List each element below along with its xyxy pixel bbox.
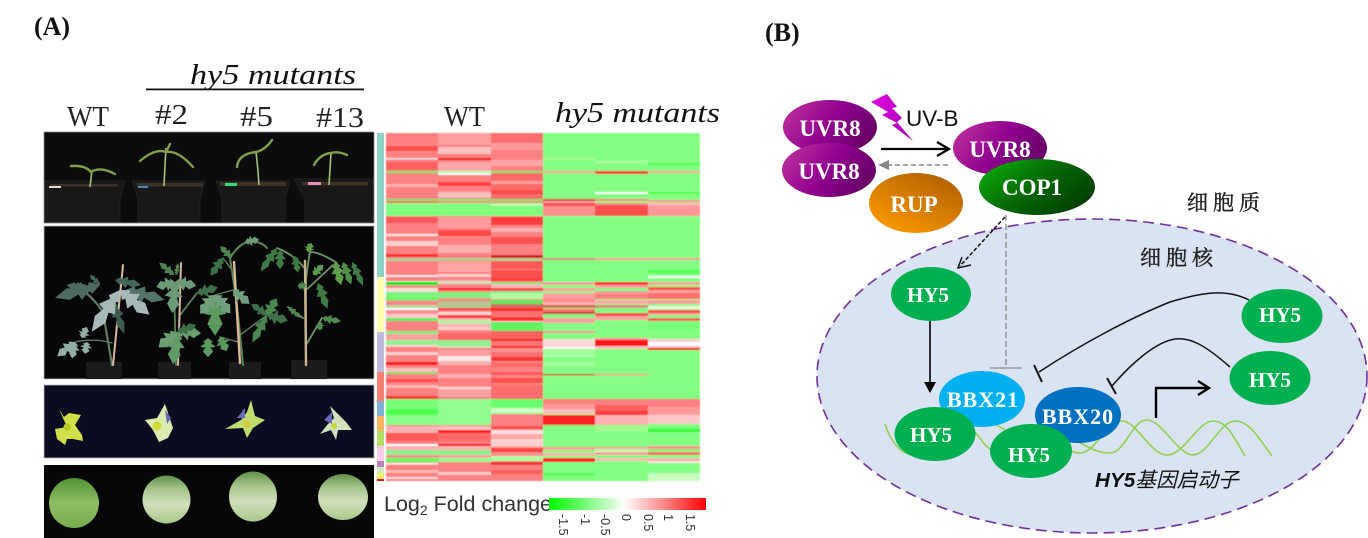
- seedlings: [90, 148, 331, 187]
- flower 2: [145, 404, 173, 442]
- nucleus: [817, 219, 1367, 533]
- BBX20: [1035, 387, 1121, 443]
- pots: [86, 360, 327, 379]
- HY5 right: HY5: [1249, 368, 1291, 392]
- arrow: UVR8 monomerisation: [881, 142, 949, 156]
- colour scale legend: -1: [578, 514, 592, 525]
- legend title: Log: [384, 492, 420, 516]
- panel label B: (B): [765, 18, 800, 47]
- DNA promoter strands: [885, 420, 1272, 456]
- colour scale legend: 0: [619, 514, 633, 521]
- photo panel: grown plants: [44, 226, 374, 379]
- column 6 stripes: [648, 163, 700, 481]
- HY5 on promoter middle: [990, 424, 1072, 478]
- arrow: HY5 to promoter: [924, 321, 936, 393]
- BBX20: BBX20: [1042, 404, 1114, 429]
- heading: hy5 mutants over photos: hy5 mutants: [190, 60, 356, 91]
- flower 3: [225, 400, 265, 438]
- HY5 upper right: [1242, 289, 1322, 343]
- label: HY5 gene promoter: HY5基因启动子: [1095, 469, 1240, 492]
- colour scale legend: -1.5: [556, 514, 570, 536]
- HY5 cytoplasm-side: [891, 267, 971, 321]
- label: nucleus: 细胞核: [1140, 246, 1218, 270]
- UV-B label: UV-B: [906, 106, 959, 131]
- column labels for photos: [67, 100, 364, 134]
- COP1: [979, 159, 1095, 215]
- sample cluster colour bar: [377, 133, 384, 481]
- heatmap heading WT: WT: [444, 102, 485, 133]
- colour scale legend: -0.5: [598, 514, 612, 536]
- panel label A: (A): [34, 12, 70, 41]
- photo panel: fruits: [44, 465, 374, 538]
- leaves plant 2: [153, 259, 220, 365]
- label: cytoplasm: 细胞质: [1187, 191, 1265, 215]
- column 5 stripes: [595, 161, 648, 461]
- column labels for photos: WT: [67, 102, 109, 133]
- HY5 on promoter left: [894, 407, 976, 461]
- photo panel: seedlings: [44, 132, 374, 223]
- colour scale legend: [549, 498, 706, 536]
- UVR8 dimer lower: UVR8: [799, 116, 861, 141]
- pots: [45, 179, 373, 222]
- column 2 stripes: [438, 133, 491, 475]
- leaves plant 3: [194, 234, 290, 357]
- HY5 on promoter left: HY5: [910, 423, 952, 447]
- stems and stakes: [75, 242, 337, 365]
- flower 1: [55, 409, 83, 445]
- column 3 stripes: [491, 133, 543, 474]
- base colours: [386, 133, 543, 481]
- RUP: RUP: [890, 192, 938, 217]
- heatmap: [386, 133, 700, 481]
- inhibition: HY5 to BBX21: [1034, 293, 1249, 382]
- column labels for photos: #13: [316, 103, 364, 134]
- COP1: COP1: [1002, 175, 1062, 200]
- dashed arrow: COP1 to HY5: [958, 217, 1005, 268]
- HY5 upper right: HY5: [1259, 303, 1301, 327]
- column 4 stripes: [543, 158, 595, 476]
- BBX21: [939, 371, 1025, 427]
- RUP: [869, 173, 963, 233]
- UVR8 monomer: [953, 121, 1047, 175]
- colour scale legend: 0.5: [641, 514, 655, 531]
- icon: UV-B lightning: [871, 94, 913, 141]
- legend title: 2: [420, 502, 428, 518]
- UVR8 dimer upper: [782, 143, 876, 197]
- leaves plant 4: [256, 241, 368, 330]
- legend title: Fold change: [428, 492, 552, 516]
- inhibition: HY5 to BBX20: [1107, 339, 1230, 394]
- dashed inhibition: COP1 to BBX21: [990, 215, 1022, 368]
- HY5 cytoplasm-side: HY5: [907, 283, 949, 307]
- arrow: RUP redimerisation: [878, 160, 948, 170]
- arrow: transcription start: [1156, 381, 1209, 418]
- leaves plant 1: [53, 272, 167, 361]
- BBX21: BBX21: [947, 387, 1019, 412]
- flower 4: [320, 406, 352, 440]
- column 1 stripes: [386, 146, 543, 479]
- column labels for photos: #2: [155, 100, 188, 131]
- UVR8 dimer upper: UVR8: [798, 159, 860, 184]
- heatmap heading hy5 mutants: hy5 mutants: [555, 98, 720, 129]
- colour scale legend: 1: [661, 514, 675, 521]
- UVR8 dimer lower: [783, 100, 877, 154]
- photo panel: flowers: [44, 385, 374, 458]
- column labels for photos: #5: [240, 102, 273, 133]
- UVR8 monomer: UVR8: [969, 137, 1031, 162]
- colour scale legend: 1.5: [683, 514, 697, 531]
- HY5 on promoter middle: HY5: [1008, 443, 1050, 467]
- HY5 right: [1230, 351, 1310, 405]
